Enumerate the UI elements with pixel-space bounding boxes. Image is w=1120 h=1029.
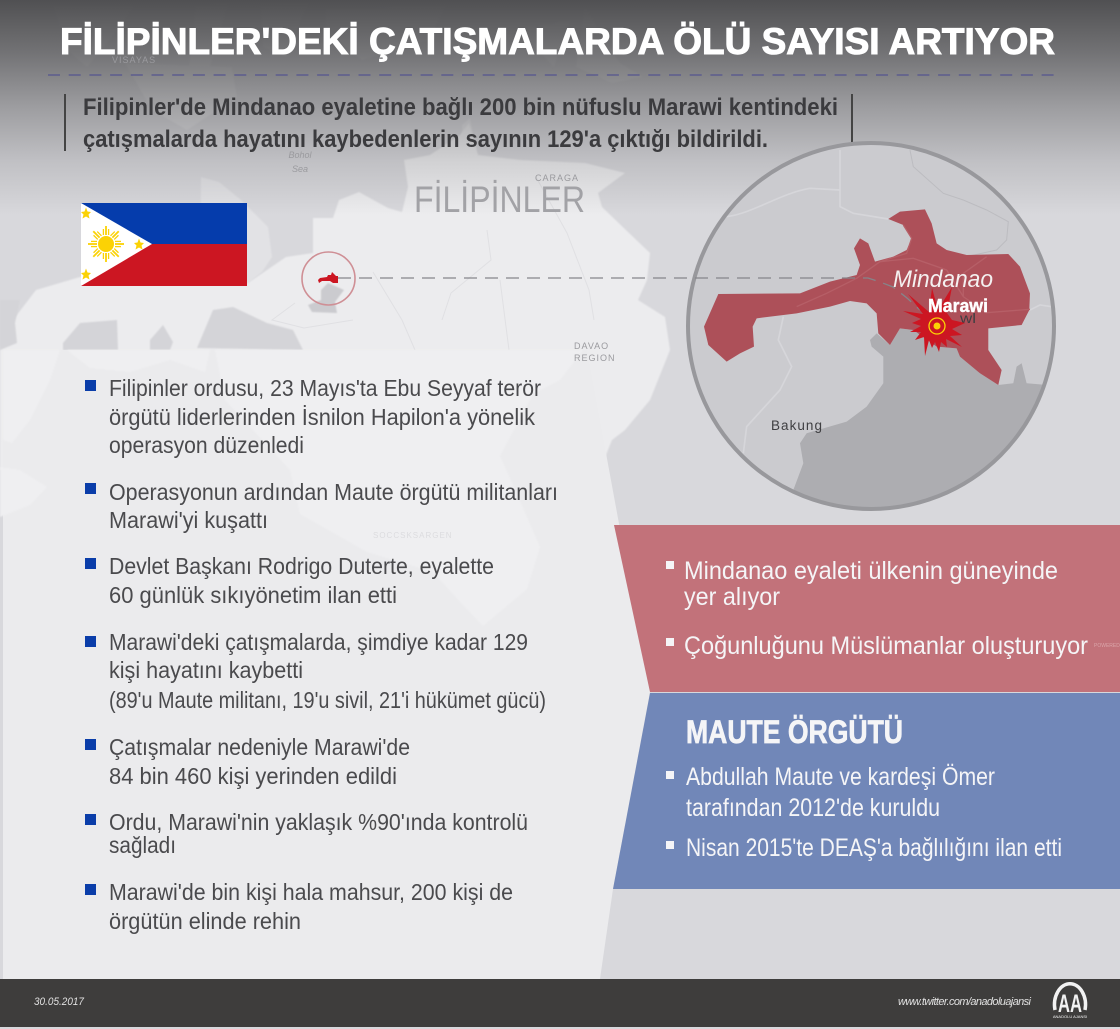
icon: Anadolu Agency logo: AA bbox=[1058, 990, 1082, 1018]
bullet 7: örgütün elinde rehin bbox=[109, 908, 301, 934]
region shape: Lanao del Sur bbox=[704, 209, 1030, 385]
bullet 1: örgütü liderlerinden İsnilon Hapilon'a yönelik bbox=[109, 404, 535, 430]
bullet 2 bbox=[85, 479, 558, 533]
locator circle bbox=[302, 252, 355, 305]
connector dashed line bbox=[338, 278, 920, 310]
footer bbox=[0, 979, 1120, 1027]
map label: Region: REGION bbox=[574, 353, 616, 363]
underlying label: wl bbox=[959, 310, 976, 326]
map circle: Mindanao zoom bbox=[338, 143, 1080, 520]
bullet 4: Marawi'deki çatışmalarda, şimdiye kadar 129 bbox=[109, 629, 528, 655]
bullet 4: kişi hayatını kaybetti bbox=[109, 657, 303, 683]
bullet 7: Marawi'de bin kişi hala mahsur, 200 kişi de bbox=[109, 879, 513, 905]
icon: Anadolu Agency logo bbox=[1053, 984, 1087, 1019]
title divider bbox=[48, 74, 1056, 76]
country label: FİLİPİNLER bbox=[414, 179, 585, 220]
bullet 3 bbox=[85, 553, 494, 608]
panel: Maute group bbox=[613, 693, 1120, 889]
bullet 1: Filipinler ordusu, 23 Mayıs'ta Ebu Seyyaf terör bbox=[109, 375, 541, 401]
social link: www.twitter.com/anadoluajansi bbox=[898, 996, 1032, 1008]
bullet 7 bbox=[85, 879, 513, 934]
fact: founded bbox=[666, 763, 995, 822]
map label: Sea: Sea bbox=[292, 164, 308, 174]
icon: explosion marker bbox=[903, 287, 965, 356]
left text panel bbox=[3, 350, 650, 979]
panel: Mindanao facts bbox=[614, 525, 1120, 692]
intro block bbox=[64, 94, 853, 153]
map roads bbox=[272, 177, 594, 350]
bullet 5: Çatışmalar nedeniyle Marawi'de bbox=[109, 734, 410, 760]
bullet 1: operasyon düzenledi bbox=[109, 432, 304, 458]
label: Marawi: Marawi bbox=[928, 296, 988, 316]
heading: Maute: MAUTE ÖRGÜTÜ bbox=[686, 714, 903, 750]
intro left bar bbox=[64, 94, 66, 151]
roads bbox=[727, 150, 1052, 453]
fact 1: Mindanao eyaleti ülkenin güneyinde bbox=[684, 557, 1058, 585]
date: 30.05.2017 bbox=[34, 996, 85, 1008]
land: Mindanao bbox=[0, 123, 670, 470]
map label: Visayas: VISAYAS bbox=[112, 55, 156, 65]
intro right bar bbox=[851, 94, 853, 142]
land: Visayas islands bbox=[54, 3, 643, 150]
fact: founded: tarafından 2012'de kuruldu bbox=[686, 794, 940, 822]
land under panel bbox=[0, 350, 583, 626]
bullet 6: sağladı bbox=[109, 832, 176, 858]
map label: Bohol: Bohol bbox=[288, 150, 313, 160]
land: Bukidnon peninsula bbox=[200, 177, 272, 283]
map label: Caraga: CARAGA bbox=[535, 173, 579, 183]
intro line 1: Filipinler'de Mindanao eyaletine bağlı 200 bin nüfuslu Marawi kentindeki bbox=[83, 94, 838, 121]
circle outline bbox=[688, 143, 1054, 509]
fact: founded: Abdullah Maute ve kardeşi Ömer bbox=[686, 763, 995, 791]
fact 1: yer alıyor bbox=[684, 583, 780, 611]
bullet 2: Operasyonun ardından Maute örgütü militanları bbox=[109, 479, 558, 505]
sea: Iligan bay bbox=[308, 283, 344, 313]
map attribution fragment: POWERED bbox=[1094, 643, 1120, 649]
intro line 2: çatışmalarda hayatını kaybedenlerin sayının 129'a çıktığı bildirildi. bbox=[83, 126, 768, 153]
circle fill bbox=[688, 143, 1054, 509]
sea: western bays bbox=[0, 300, 303, 350]
region roads bbox=[797, 225, 1030, 313]
fact: allegiance: Nisan 2015'te DEAŞ'a bağlılığını ilan etti bbox=[686, 834, 1062, 862]
title: FİLİPİNLER'DEKİ ÇATIŞMALARDA ÖLÜ SAYISI ARTIYOR bbox=[60, 21, 1055, 62]
top gradient bbox=[0, 0, 1120, 215]
panel: left bullet list bbox=[85, 375, 558, 934]
bullet 5: 84 bin 460 kişi yerinden edildi bbox=[109, 763, 397, 789]
icon: Philippine flag bbox=[81, 203, 247, 286]
fact 1 bbox=[666, 557, 1058, 611]
map label: Soccsksargen: SOCCSKSARGEN bbox=[373, 531, 453, 540]
bullet 3: 60 günlük sıkıyönetim ilan etti bbox=[109, 582, 397, 608]
boundary bbox=[910, 150, 1008, 257]
map label: Davao: DAVAO bbox=[574, 341, 609, 351]
bullet 6 bbox=[85, 809, 528, 858]
bullet 5 bbox=[85, 734, 410, 789]
label: Mindanao: Mindanao bbox=[893, 266, 993, 293]
fact 2: Çoğunluğunu Müslümanlar oluşturuyor bbox=[684, 632, 1088, 660]
bullet 4: (89'u Maute militanı, 19'u sivil, 21'i hükümet gücü) bbox=[109, 687, 546, 713]
bullet 4 bbox=[85, 629, 546, 713]
bullet 6: Ordu, Marawi'nin yaklaşık %90'ında kontrolü bbox=[109, 809, 528, 835]
label: Bakung: Bakung bbox=[771, 418, 822, 433]
bullet 3: Devlet Başkanı Rodrigo Duterte, eyalette bbox=[109, 553, 494, 579]
icon: Anadolu Agency logo: ANADOLU AJANSI bbox=[1053, 1014, 1087, 1019]
sea bbox=[794, 328, 1042, 507]
bullet 2: Marawi'yi kuşattı bbox=[109, 507, 268, 533]
bullet 1 bbox=[85, 375, 541, 458]
